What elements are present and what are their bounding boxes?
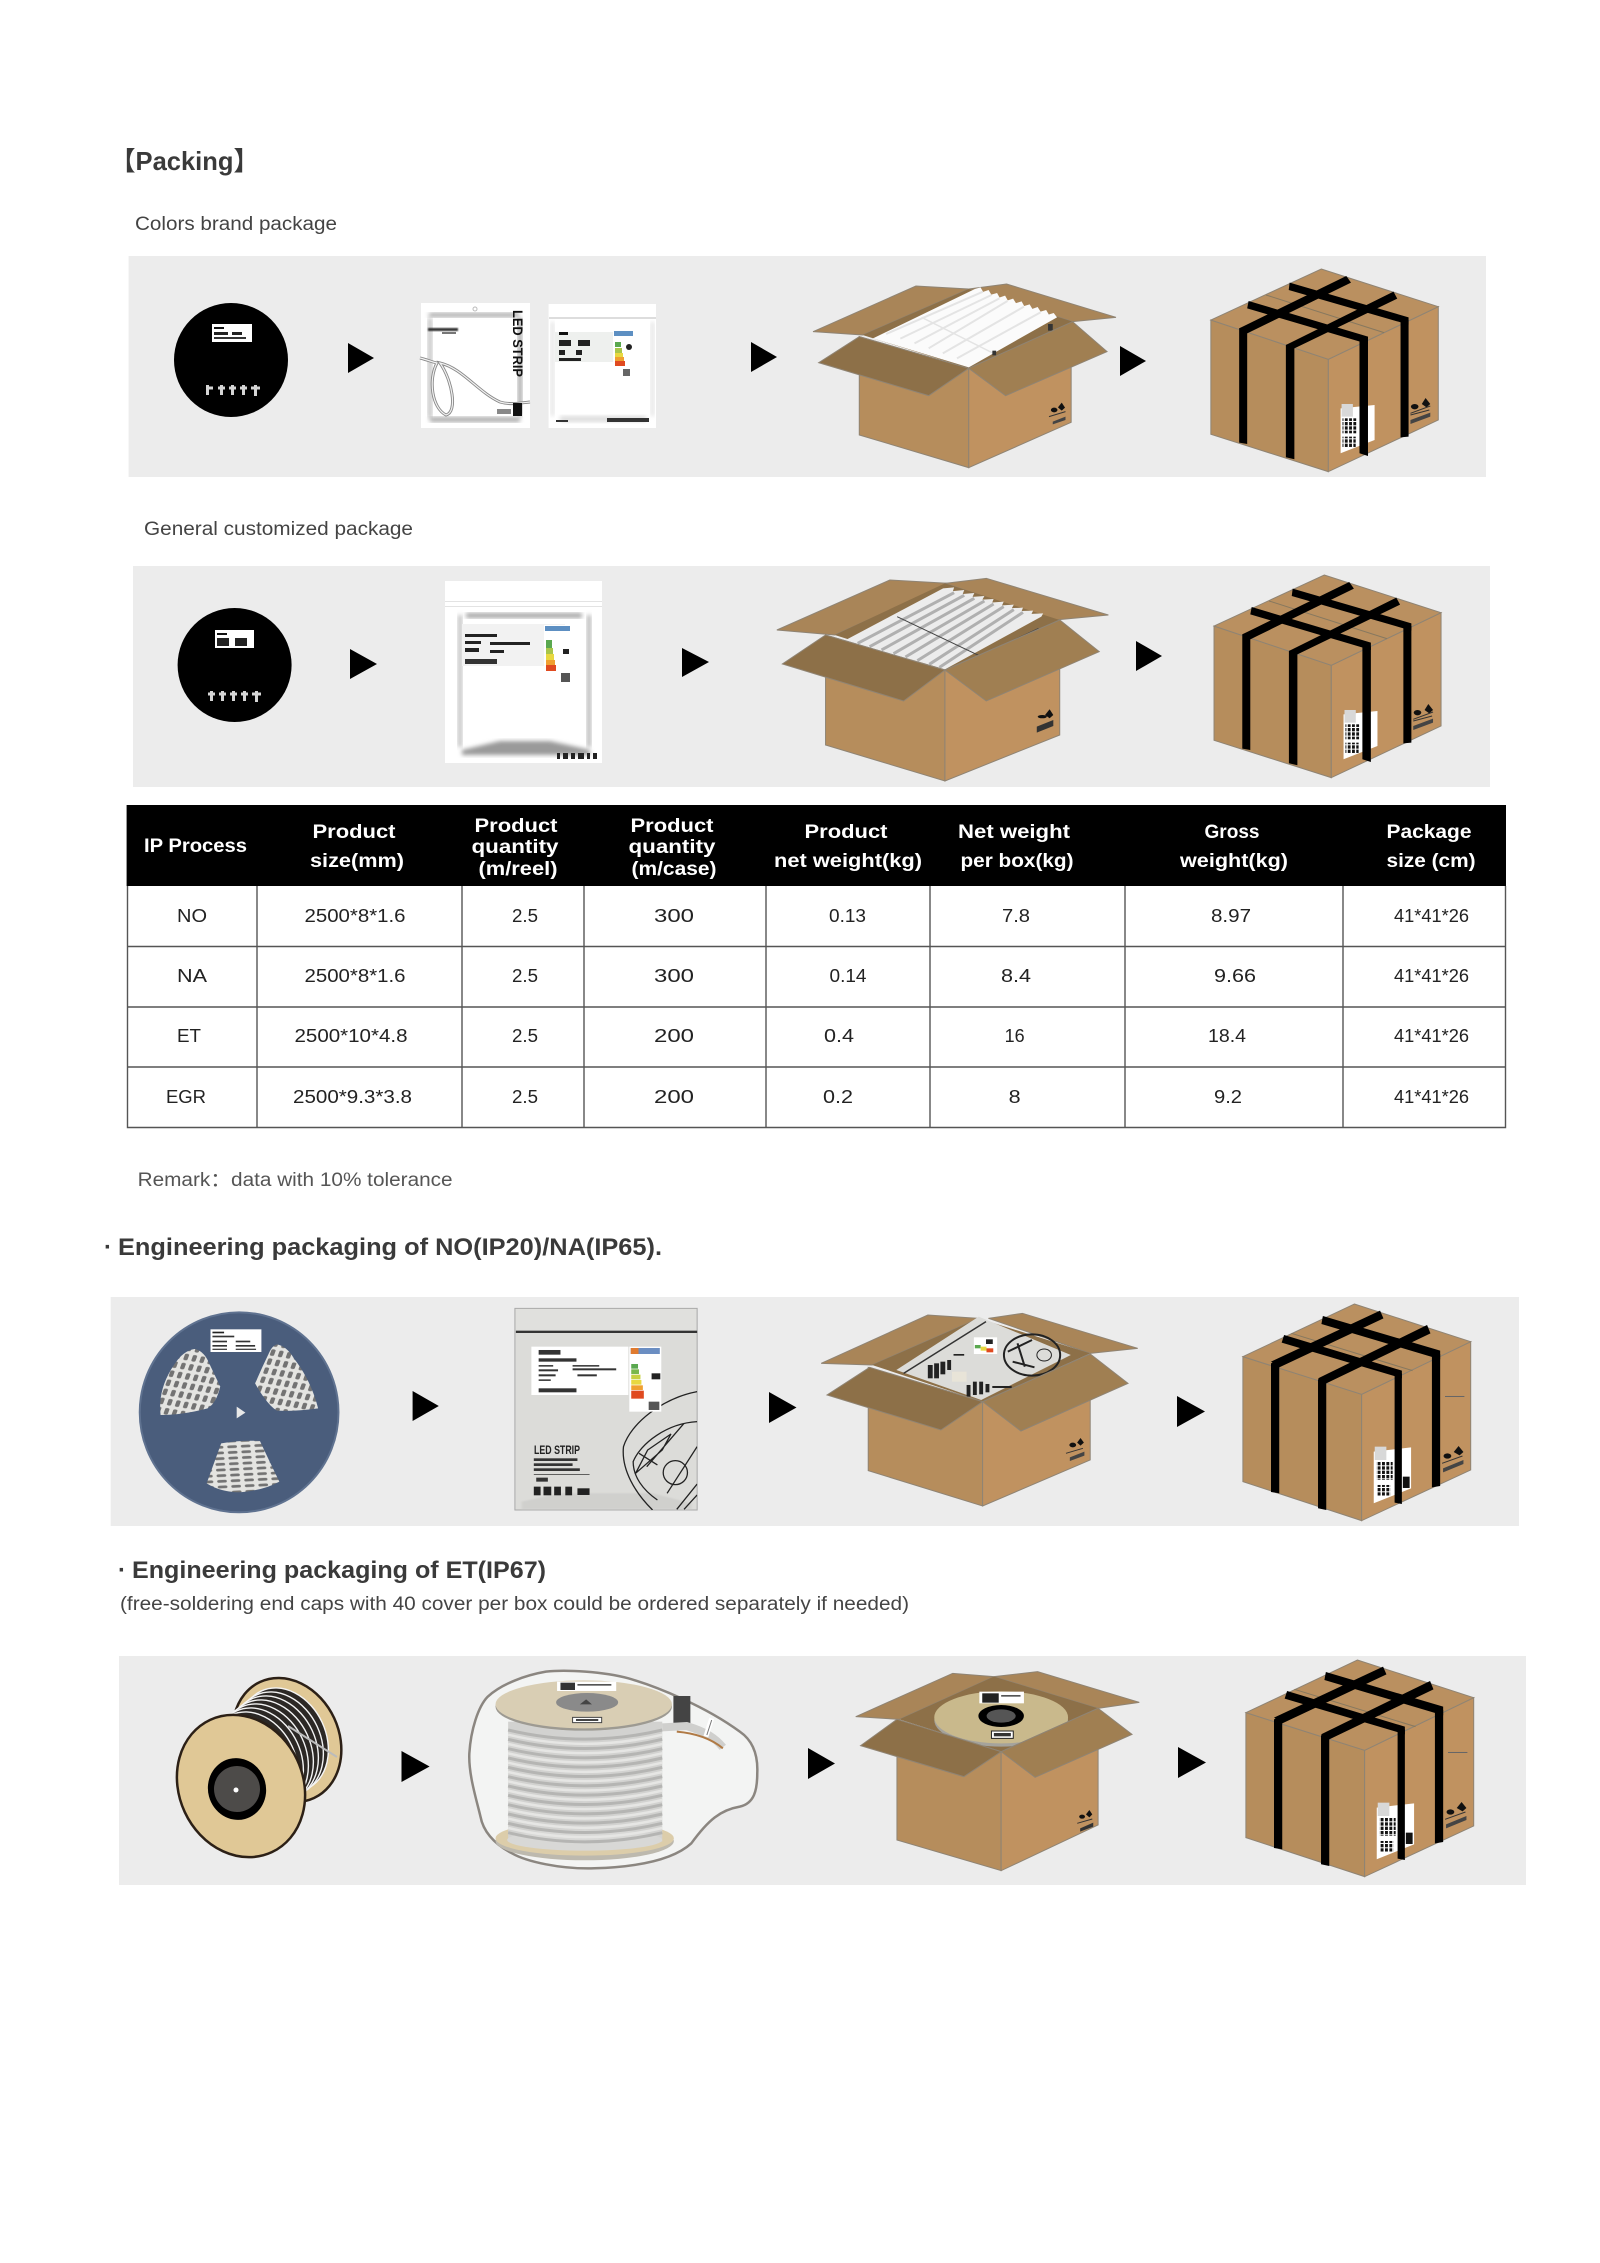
table header: Net weight xyxy=(958,822,1071,843)
icon: printed bag front xyxy=(420,303,530,428)
arrow xyxy=(769,1392,796,1423)
row: EGR: 200 xyxy=(654,1086,694,1107)
heading: Engineering packaging of ET: Engineering packaging of ET(IP67) xyxy=(132,1557,546,1584)
table header: Product xyxy=(630,816,714,837)
icon: strapped closed box xyxy=(1246,1660,1474,1877)
bag small print xyxy=(534,1458,590,1495)
icon: open box with bag xyxy=(821,1313,1138,1506)
row: NO: 300 xyxy=(654,905,694,926)
table header xyxy=(127,805,1506,886)
row: NO: 41*41*26 xyxy=(1394,905,1469,926)
row: NO xyxy=(177,905,1469,926)
heading: Engineering packaging of NO/NA: Engineering packaging of NO(IP20)/NA(IP65). xyxy=(118,1234,662,1261)
row: ET xyxy=(177,1025,1469,1046)
row: NA xyxy=(177,965,1469,986)
title: Packing: 【Packing】 xyxy=(110,146,259,176)
arrow xyxy=(1136,641,1162,671)
row: NO: 2.5 xyxy=(512,905,538,926)
table header: (m/case) xyxy=(632,859,716,880)
row: EGR: 0.2 xyxy=(823,1086,853,1107)
row: NA: 0.14 xyxy=(830,965,866,986)
row: NA: NA xyxy=(177,965,208,986)
row: NO: 7.8 xyxy=(1002,905,1030,926)
row: NO: 0.13 xyxy=(829,905,866,926)
arrow xyxy=(348,343,374,373)
row: NO: 8.97 xyxy=(1211,905,1251,926)
row: NO: NO xyxy=(177,905,207,926)
row: ET: 0.4 xyxy=(824,1025,854,1046)
icon: black reel xyxy=(174,303,288,417)
row: EGR: 9.2 xyxy=(1214,1086,1242,1107)
row: NA: 8.4 xyxy=(1001,965,1031,986)
row: NO: 2500*8*1.6 xyxy=(304,905,406,926)
panel: ET engineering packaging flow xyxy=(119,1656,1526,1885)
icon: strapped closed box xyxy=(1211,269,1438,472)
row: EGR: 2.5 xyxy=(512,1086,538,1107)
row: EGR: 8 xyxy=(1009,1086,1021,1107)
arrow xyxy=(350,649,377,679)
icon: strapped closed box xyxy=(1243,1304,1471,1521)
row: ET: 41*41*26 xyxy=(1394,1025,1469,1046)
icon: customized bag xyxy=(445,581,602,763)
arrow xyxy=(402,1751,430,1782)
row: NA: 41*41*26 xyxy=(1394,965,1469,986)
row: ET: 18.4 xyxy=(1208,1025,1246,1046)
table header: size(mm) xyxy=(310,851,404,872)
arrow xyxy=(808,1748,835,1779)
icon: open box with white bags xyxy=(813,284,1116,468)
label: General customized package: General customized package xyxy=(144,519,413,540)
icon: grey bag with label xyxy=(515,1308,697,1510)
row: NA: 9.66 xyxy=(1214,965,1256,986)
text: LED STRIP on bag: LED STRIP xyxy=(534,1443,580,1457)
table header: Product xyxy=(474,816,558,837)
icon: spool in plastic bag xyxy=(469,1671,757,1868)
table header: quantity xyxy=(628,837,716,858)
panel: colors brand package flow xyxy=(129,256,1486,477)
arrow xyxy=(1177,1396,1205,1427)
row: ET: 16 xyxy=(1005,1025,1025,1046)
table header: quantity xyxy=(472,837,559,858)
row: NA: 300 xyxy=(654,965,694,986)
arrow xyxy=(1120,346,1146,376)
icon: open box with spool xyxy=(856,1672,1139,1871)
table header: Package xyxy=(1386,822,1472,843)
table header: Gross xyxy=(1204,822,1260,843)
table header: (m/reel) xyxy=(478,859,558,880)
row: NA: 2.5 xyxy=(512,965,538,986)
icon: open box with grey bags xyxy=(777,578,1108,781)
heading: Engineering packaging of NO/NA: · xyxy=(104,1234,112,1261)
table header: net weight(kg) xyxy=(774,851,922,872)
icon: wooden spool with strip xyxy=(154,1660,361,1878)
table header: per box(kg) xyxy=(960,851,1074,872)
row: ET: ET xyxy=(177,1025,201,1046)
arrow xyxy=(682,648,709,677)
table header: IP Process xyxy=(144,836,247,857)
row: EGR: 41*41*26 xyxy=(1394,1086,1469,1107)
arrow xyxy=(751,342,777,372)
note: end caps: (free-soldering end caps with 40 cover per box could be ordered separately if needed) xyxy=(120,1594,909,1615)
panel: general customized package flow xyxy=(133,566,1490,787)
table header: Product xyxy=(804,822,888,843)
text: LED STRIP on bag: LED STRIP xyxy=(510,310,526,377)
table header: weight(kg) xyxy=(1179,851,1288,872)
table header: Product xyxy=(312,822,396,843)
row: ET: 200 xyxy=(654,1025,694,1046)
row: EGR: 2500*9.3*3.8 xyxy=(293,1086,412,1107)
icon: black reel xyxy=(178,608,292,722)
table: packing data xyxy=(127,805,1506,1128)
label: Colors brand package: Colors brand package xyxy=(135,214,337,235)
panel: NO/NA engineering packaging flow xyxy=(111,1297,1519,1526)
row: ET: 2500*10*4.8 xyxy=(294,1025,408,1046)
icon: printed bag back xyxy=(549,304,656,428)
row: EGR xyxy=(166,1086,1469,1107)
row: EGR: EGR xyxy=(166,1086,206,1107)
icon: blue reel with LED strip xyxy=(140,1312,338,1512)
row: ET: 2.5 xyxy=(512,1025,538,1046)
row: NA: 2500*8*1.6 xyxy=(304,965,406,986)
remark: Remark：data with 10% tolerance xyxy=(138,1170,453,1191)
table header: size (cm) xyxy=(1386,851,1476,872)
arrow xyxy=(413,1391,439,1421)
icon: strapped closed box xyxy=(1214,575,1441,778)
arrow xyxy=(1178,1747,1206,1778)
heading: Engineering packaging of ET: · xyxy=(118,1557,126,1584)
